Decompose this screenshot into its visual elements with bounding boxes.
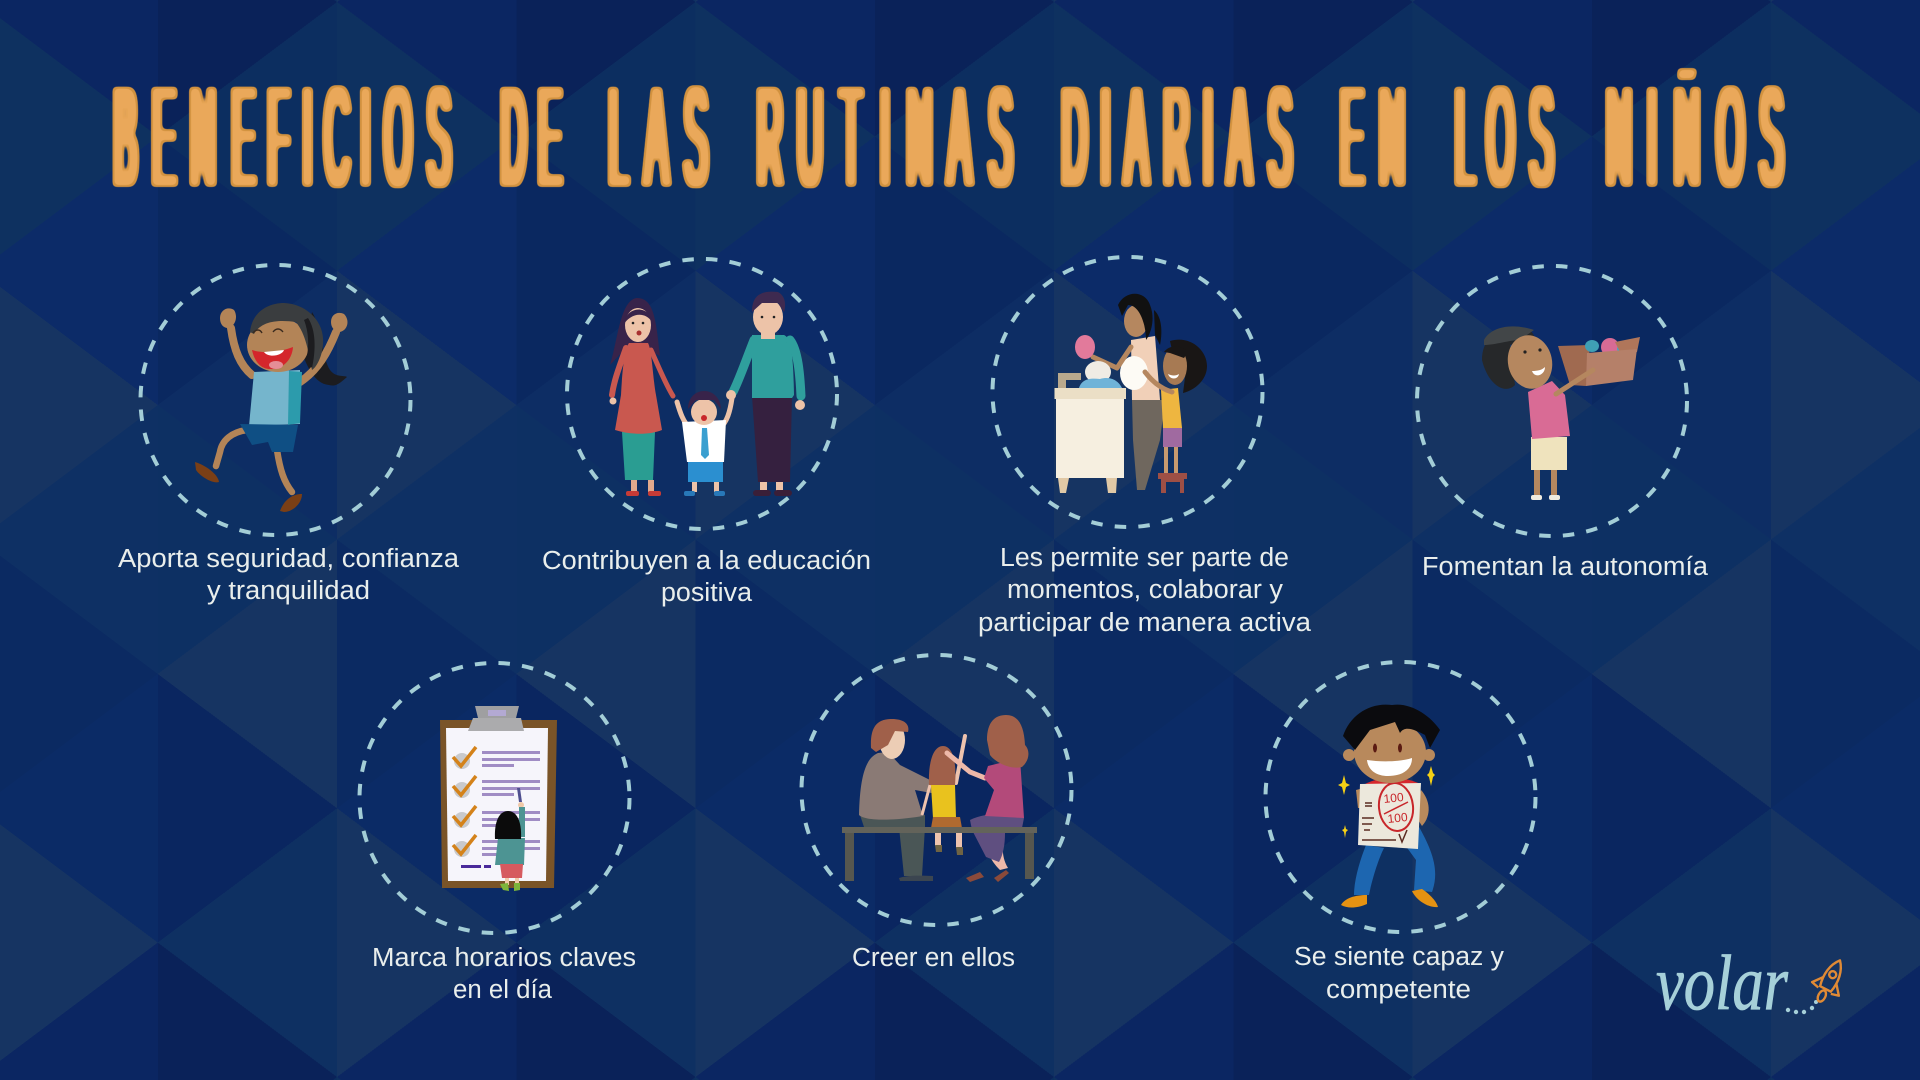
caption 2: positiva (661, 579, 753, 607)
caption 3: Les permite ser parte de (1000, 544, 1289, 572)
caption 1 (118, 545, 460, 605)
panel: capaz y competente (1266, 662, 1536, 1004)
caption 1: y tranquilidad (207, 577, 370, 605)
caption 6: Creer en ellos (852, 944, 1015, 972)
caption 3: momentos, colaborar y (1007, 576, 1283, 604)
caption 1: Aporta seguridad, confianza (118, 545, 460, 573)
dashed circle 6 (802, 655, 1072, 925)
icon: boy holding exam: 100 (1383, 790, 1405, 806)
caption 4: Fomentan la autonomía (1422, 553, 1709, 581)
caption 5: en el día (453, 976, 553, 1004)
logo: volar (1656, 939, 1853, 1026)
panel: autonomía (1417, 266, 1709, 581)
caption 7 (1294, 943, 1504, 1004)
icon: jumping girl (195, 303, 347, 512)
icon: boy holding exam: 100 (1387, 810, 1409, 826)
icon: mother and daughter washing dishes (1054, 294, 1207, 493)
caption 3: participar de manera activa (978, 609, 1312, 637)
panel: ser parte (978, 257, 1312, 637)
icon: family holding hands (610, 292, 805, 496)
caption 5: Marca horarios claves (372, 944, 636, 972)
dashed circle 2 (567, 259, 837, 529)
logo trail dots (1786, 1000, 1818, 1014)
icon: clipboard checklist (440, 706, 557, 891)
dashed circle 4 (1417, 266, 1687, 536)
caption 5 (372, 944, 636, 1004)
caption 2: Contribuyen a la educación (542, 547, 871, 575)
dashed circle 7 (1266, 662, 1536, 932)
caption 7: Se siente capaz y (1294, 943, 1504, 971)
dashed circle 1 (140, 265, 410, 535)
panel: horarios (360, 663, 636, 1004)
caption 2 (542, 547, 871, 607)
caption 7: competente (1326, 976, 1471, 1004)
panel: creer en ellos (802, 655, 1072, 972)
dashed circle 5 (360, 663, 630, 933)
title: BENEFICIOS DE LAS RUTINAS DIARIAS EN LOS NIÑOS (114, 58, 1783, 218)
icon: rocket (1806, 954, 1853, 1008)
icon: child lifting box (1482, 326, 1640, 500)
panel: seguridad (118, 265, 460, 605)
icon: boy holding exam (1338, 705, 1440, 908)
dashed circle 3 (992, 257, 1262, 527)
caption 3 (978, 544, 1312, 637)
icon: family on bench (842, 715, 1037, 882)
logo wordmark: volar (1656, 939, 1789, 1026)
panel: educación positiva (542, 259, 871, 607)
